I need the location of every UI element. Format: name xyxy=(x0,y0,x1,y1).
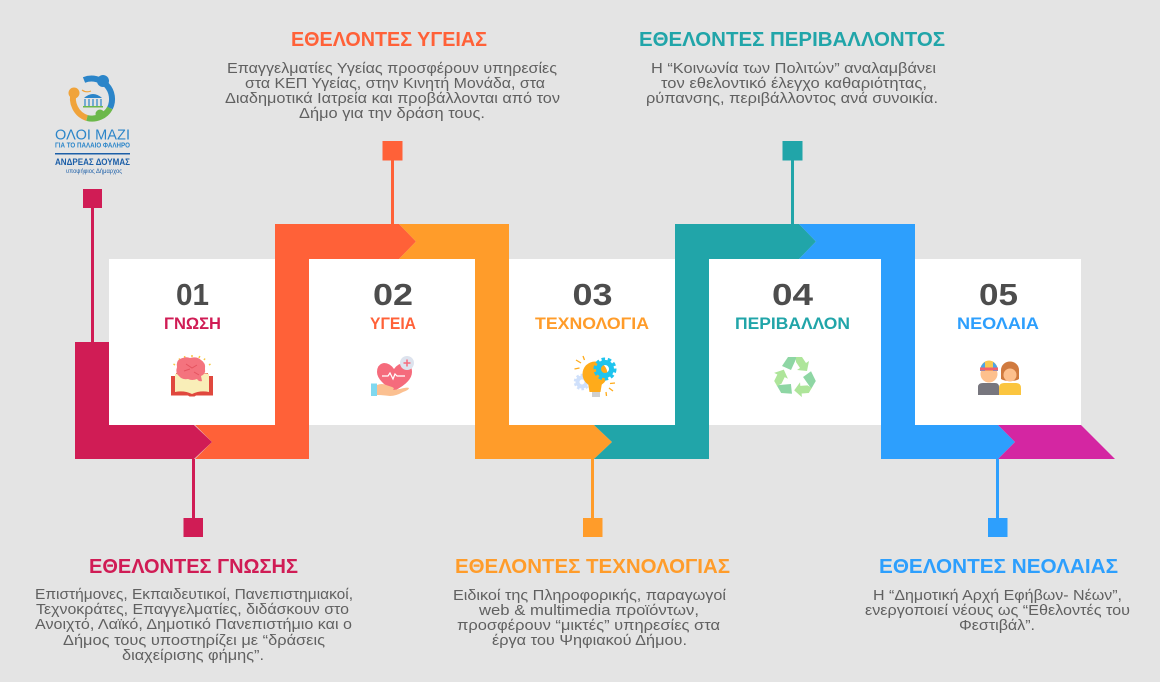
icon: young people xyxy=(978,361,1021,395)
text block: ρύπανσης, περιβάλλοντος ανά συνοικία. xyxy=(646,90,938,107)
text block: Δήμος τους υποστηρίζει με “δράσεις xyxy=(63,632,325,649)
number 02: 02 xyxy=(373,277,413,312)
connector: perivallon xyxy=(782,141,802,224)
icon: heart in hand xyxy=(371,356,414,396)
text block xyxy=(865,587,1130,634)
label gnosi: ΓΝΩΣΗ xyxy=(164,314,221,333)
text block: Δήμο για την δράση τους. xyxy=(299,105,485,122)
label technologia: ΤΕΧΝΟΛΟΓΙΑ xyxy=(535,314,649,333)
icon: recycling arrows xyxy=(771,357,819,399)
timeline ribbon xyxy=(75,141,1115,537)
text block: Διαδημοτικά Ιατρεία και προβάλλονται από τον xyxy=(225,90,560,107)
heading: ΕΘΕΛΟΝΤΕΣ ΠΕΡΙΒΑΛΛΟΝΤΟΣ xyxy=(639,28,945,51)
ribbon segment: crimson xyxy=(75,342,212,459)
text block xyxy=(453,587,727,649)
heading: ΕΘΕΛΟΝΤΕΣ ΝΕΟΛΑΙΑΣ xyxy=(879,555,1118,578)
callout: ethelontes ygeias xyxy=(225,28,560,122)
text block: Ειδικοί της Πληροφορικής, παραγωγοί xyxy=(453,587,727,604)
label perivallon: ΠΕΡΙΒΑΛΛΟΝ xyxy=(735,314,850,333)
text block: προσφέρουν “μικτές” υπηρεσίες στα xyxy=(457,617,720,634)
text block: Ανοιχτό, Λαϊκό, Δημοτικό Πανεπιστήμιο και ο xyxy=(35,616,352,633)
text block: τον εθελοντικό έλεγχο καθαριότητας, xyxy=(661,75,927,92)
ribbon segment: magenta xyxy=(998,425,1115,459)
ribbon segment: blue xyxy=(799,224,1015,459)
connector: gnosi bottom xyxy=(184,459,203,537)
step 03 xyxy=(535,277,649,397)
label neolaia: ΝΕΟΛΑΙΑ xyxy=(957,314,1039,333)
text block: Η “Δημοτική Αρχή Εφήβων- Νέων”, xyxy=(873,587,1122,604)
text block: στα ΚΕΠ Υγείας, στην Κινητή Μονάδα, στα xyxy=(245,75,545,92)
number 04: 04 xyxy=(772,277,814,312)
logo ring xyxy=(68,75,112,119)
logo text: υποψήφιος Δήμαρχος xyxy=(66,168,122,175)
text block xyxy=(35,586,353,664)
icon: light bulb and gears xyxy=(574,356,615,397)
logo text: ΓΙΑ ΤΟ ΠΑΛΑΙΟ ΦΑΛΗΡΟ xyxy=(55,142,130,150)
step 01 xyxy=(164,277,221,396)
number 03: 03 xyxy=(572,277,612,312)
text block: Τεχνοκράτες, Επαγγελματίες, διδάσκουν στο xyxy=(36,601,349,618)
logo text xyxy=(55,128,131,175)
heading: ΕΘΕΛΟΝΤΕΣ ΤΕΧΝΟΛΟΓΙΑΣ xyxy=(455,555,730,578)
logo building xyxy=(82,90,103,108)
connector: ygeia xyxy=(382,141,402,224)
logo text: ΑΝΔΡΕΑΣ ΔΟΥΜΑΣ xyxy=(55,157,131,167)
number 01: 01 xyxy=(176,277,209,312)
text block: web & multimedia προϊόντων, xyxy=(478,602,699,619)
text block: Επιστήμονες, Εκπαιδευτικοί, Πανεπιστημιακοί, xyxy=(35,586,353,603)
callout: ethelontes neolaias xyxy=(865,555,1130,634)
icon: brain on book xyxy=(171,355,213,396)
text block: έργα του Ψηφιακού Δήμου. xyxy=(492,632,687,649)
heading: ΕΘΕΛΟΝΤΕΣ ΥΓΕΙΑΣ xyxy=(291,28,487,51)
text block: Φεστιβάλ”. xyxy=(959,617,1035,634)
ribbon segment: orange xyxy=(399,224,612,459)
callout: ethelontes technologias xyxy=(453,555,730,649)
ribbon segment: teal xyxy=(594,224,816,459)
callout: ethelontes perivallontos xyxy=(639,28,945,107)
number 05: 05 xyxy=(979,277,1018,312)
ribbon segment: orange-red xyxy=(195,224,416,459)
callout: ethelontes gnosis xyxy=(35,555,353,664)
text block: διαχείρισης φήμης”. xyxy=(122,647,264,664)
step 05 xyxy=(957,277,1039,395)
connector: gnosi top xyxy=(83,189,102,342)
text block xyxy=(225,60,560,122)
text block: ενεργοποιεί νέους ως “Εθελοντές του xyxy=(865,602,1130,619)
connector: technologia xyxy=(583,459,602,537)
connector: neolaia xyxy=(988,459,1008,537)
logo xyxy=(55,75,131,175)
step 02 xyxy=(370,277,416,396)
text block xyxy=(646,60,938,107)
white panel xyxy=(109,259,1081,425)
label ygeia: ΥΓΕΙΑ xyxy=(370,314,416,333)
text block: Η “Κοινωνία των Πολιτών” αναλαμβάνει xyxy=(651,60,936,77)
text block: Επαγγελματίες Υγείας προσφέρουν υπηρεσίες xyxy=(227,60,557,77)
heading: ΕΘΕΛΟΝΤΕΣ ΓΝΩΣΗΣ xyxy=(89,555,298,578)
logo text: ΟΛΟΙ ΜΑΖΙ xyxy=(55,128,130,144)
step 04 xyxy=(735,277,850,399)
